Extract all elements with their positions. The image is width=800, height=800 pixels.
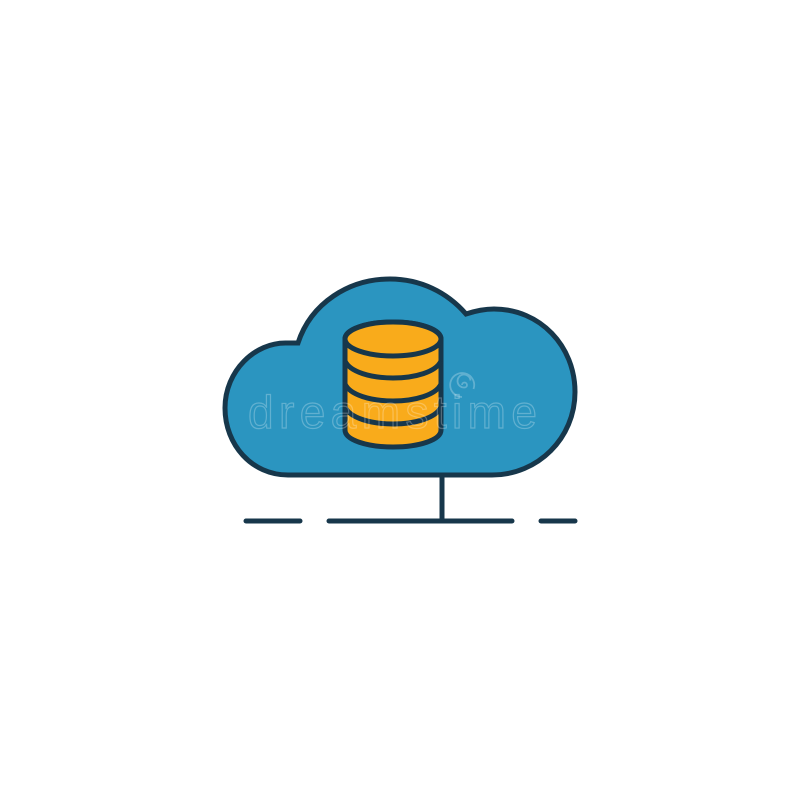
watermark spiral <box>450 373 474 397</box>
icon: cloud <box>225 279 575 475</box>
network connector <box>246 475 575 521</box>
icon: database cylinder <box>345 322 441 447</box>
watermark <box>248 373 537 438</box>
watermark text: dreamstime <box>248 386 537 438</box>
